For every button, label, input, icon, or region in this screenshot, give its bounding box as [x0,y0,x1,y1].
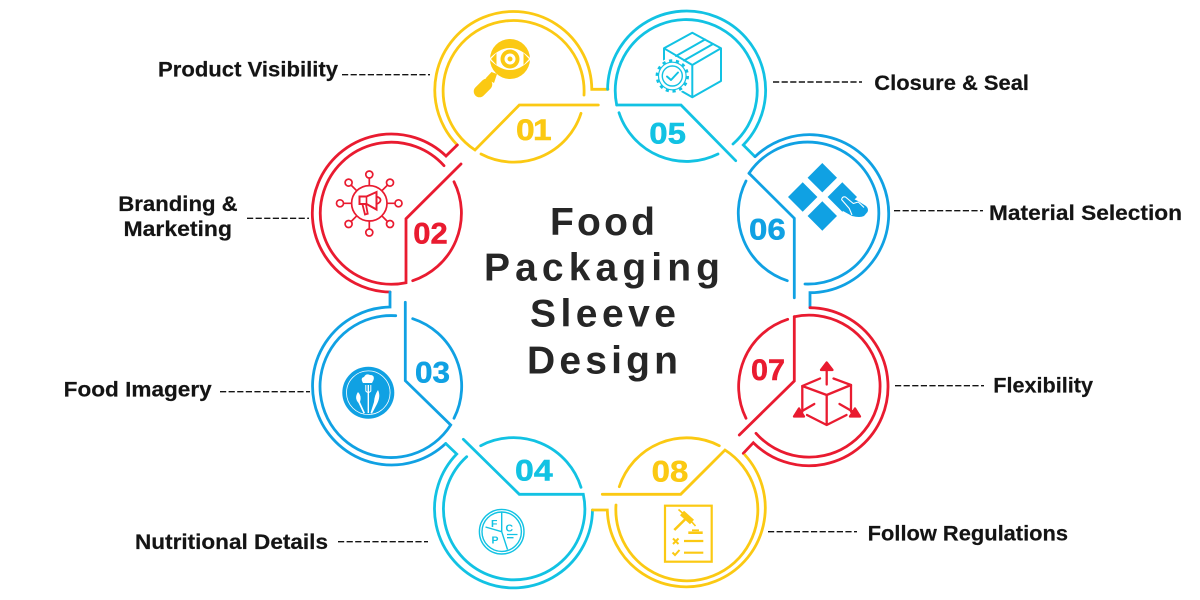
label: closure and seal: Closure & Seal [874,72,1029,95]
number 08: 08 [652,456,688,489]
panel 03: food imagery [64,292,462,465]
label: flexibility: Flexibility [993,375,1093,398]
label: branding and marketing: Marketing [124,218,232,241]
leader line 02 [247,217,309,219]
label: product visibility: Product Visibility [158,59,338,82]
panel 06: material selection [738,135,1182,308]
leader line 04 [338,541,428,543]
rings 05 [608,11,766,161]
label: branding and marketing: Branding & [118,193,238,216]
number 04: 04 [515,455,553,488]
title [484,201,720,382]
panel 04: nutritional details [135,438,592,588]
rings 01 [435,11,608,162]
number 05: 05 [649,117,686,150]
icon: nutrition pie: F [491,518,498,530]
title: Packaging [484,247,720,290]
panel 02: branding and marketing [118,134,461,292]
icon: plate with cutlery [342,367,394,419]
rings 08 [592,438,765,587]
label: material selection: Material Selection [989,202,1182,225]
panel 05: closure and seal [608,11,1029,161]
leader line 06 [894,210,983,212]
panel 07: flexibility [739,308,1093,466]
rings 04 [435,438,592,588]
number 02: 02 [413,217,448,250]
icon: box with seal [654,33,721,97]
leader line 05 [773,81,862,83]
leader line 08 [768,531,857,533]
panel 01: product visibility [158,11,608,162]
label: nutritional details: Nutritional Details [135,531,328,554]
icon: document with gavel [665,506,712,562]
rings 03 [313,292,462,465]
icon: cube with arrows [794,362,860,425]
number 01: 01 [516,113,551,147]
number 06: 06 [749,213,786,246]
rings 06 [738,135,889,308]
leader line 07 [895,385,984,387]
panel 08: follow regulations [592,438,1068,587]
number 07: 07 [751,354,785,387]
rings 02 [312,134,461,292]
label: follow regulations: Follow Regulations [868,523,1068,546]
number 03: 03 [415,357,450,390]
leader line 03 [220,391,310,393]
title: Sleeve [530,293,676,336]
icon: magnifier with eye [480,39,531,92]
rings 07 [739,308,888,466]
icon: nutrition pie [479,509,524,554]
icon: tiles with hand [788,163,868,231]
title: Food [550,201,655,244]
icon: nutrition pie: C [506,522,514,534]
icon: nutrition pie: P [492,534,499,546]
icon: megaphone network [336,171,402,236]
leader line 01 [342,74,430,76]
label: branding and marketing [118,193,238,241]
title: Design [527,339,678,382]
label: food imagery: Food Imagery [64,379,212,402]
